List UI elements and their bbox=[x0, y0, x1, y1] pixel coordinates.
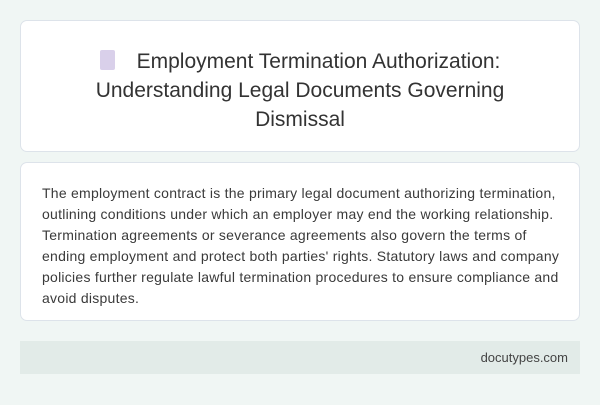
footer text: docutypes.com bbox=[481, 350, 568, 365]
title: Employment Termination Authorization: Understanding Legal Documents Governing Dismissal bbox=[96, 50, 504, 131]
panel: title card bbox=[20, 20, 580, 152]
footer bar bbox=[20, 341, 580, 374]
text block: The employment contract is the primary legal document authorizing termination, outlining conditions under which an employer may end the working relationship. Termination agreements or severance agreements also govern the terms of ending employment and protect both parties' rights. Statutory laws and company policies further regulate lawful termination procedures to ensure compliance and avoid disputes. bbox=[42, 185, 559, 306]
icon: document bbox=[100, 50, 115, 70]
panel: description bbox=[20, 162, 580, 321]
